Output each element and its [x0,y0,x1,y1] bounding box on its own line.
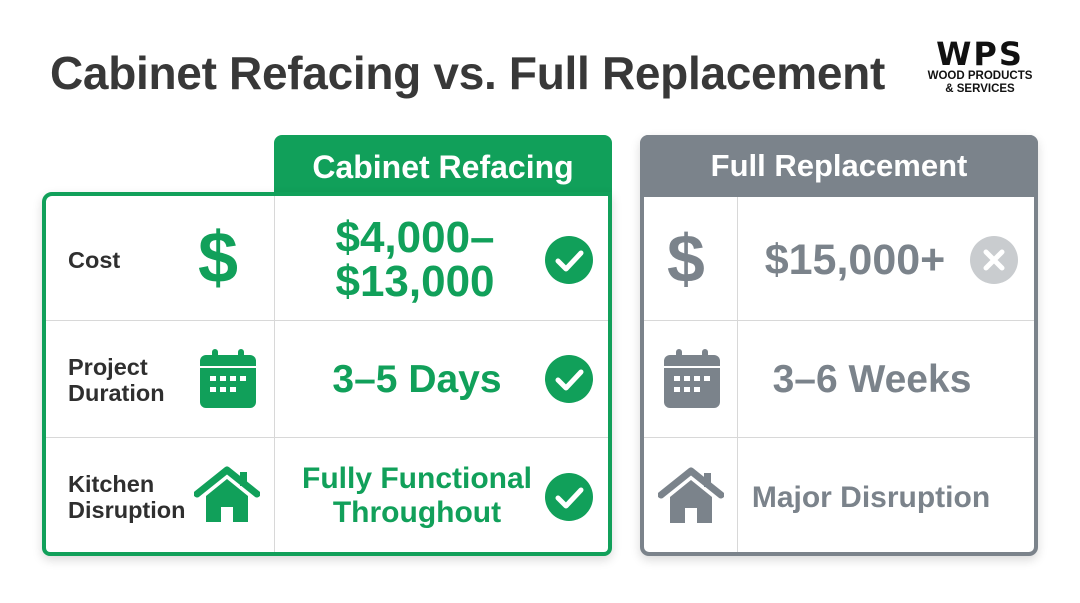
value: disruption: Major Disruption [752,481,990,514]
icon: dollar gray: $ [667,221,705,297]
table box [42,192,612,556]
value: disruption: Fully Functional [302,462,532,495]
row label: project duration: Duration [68,380,165,406]
value: cost: $15,000+ [765,236,945,284]
icon: house [194,466,260,522]
header tab: cabinet refacing: Cabinet Refacing [312,149,574,185]
icon: check [545,473,593,521]
value: cost: $13,000 [335,257,495,306]
title: Cabinet Refacing vs. Full Replacement [50,47,885,99]
logo: WOOD PRODUCTS [928,70,1032,82]
logo: & SERVICES [945,83,1015,95]
header tab: cabinet refacing [274,135,612,199]
icon: check [545,236,593,284]
value: duration: 3–6 Weeks [773,358,971,401]
row label: project duration [68,354,165,406]
row label: kitchen disruption [68,471,186,523]
icon: x [970,236,1018,284]
row label: kitchen disruption: Kitchen [68,471,154,497]
header: full replacement [640,135,1038,197]
value: duration: 3–5 Days [332,358,502,401]
logo: WPS [936,35,1024,73]
row label: kitchen disruption: Disruption [68,497,186,523]
value: cost [335,213,495,306]
icon: calendar gray [664,349,720,408]
icon: calendar [200,349,256,408]
icon: house gray [658,467,724,523]
value: disruption [302,462,532,529]
value: disruption: Throughout [333,496,501,529]
row label: cost: Cost [68,247,120,273]
row label: project duration: Project [68,354,148,380]
icon: check [545,355,593,403]
header: full replacement: Full Replacement [711,148,967,183]
panel: full replacement [636,135,1042,564]
panel: cabinet refacing [38,135,616,564]
icon: dollar: $ [198,218,238,298]
logo [928,35,1032,95]
value: cost: $4,000– [335,213,495,262]
